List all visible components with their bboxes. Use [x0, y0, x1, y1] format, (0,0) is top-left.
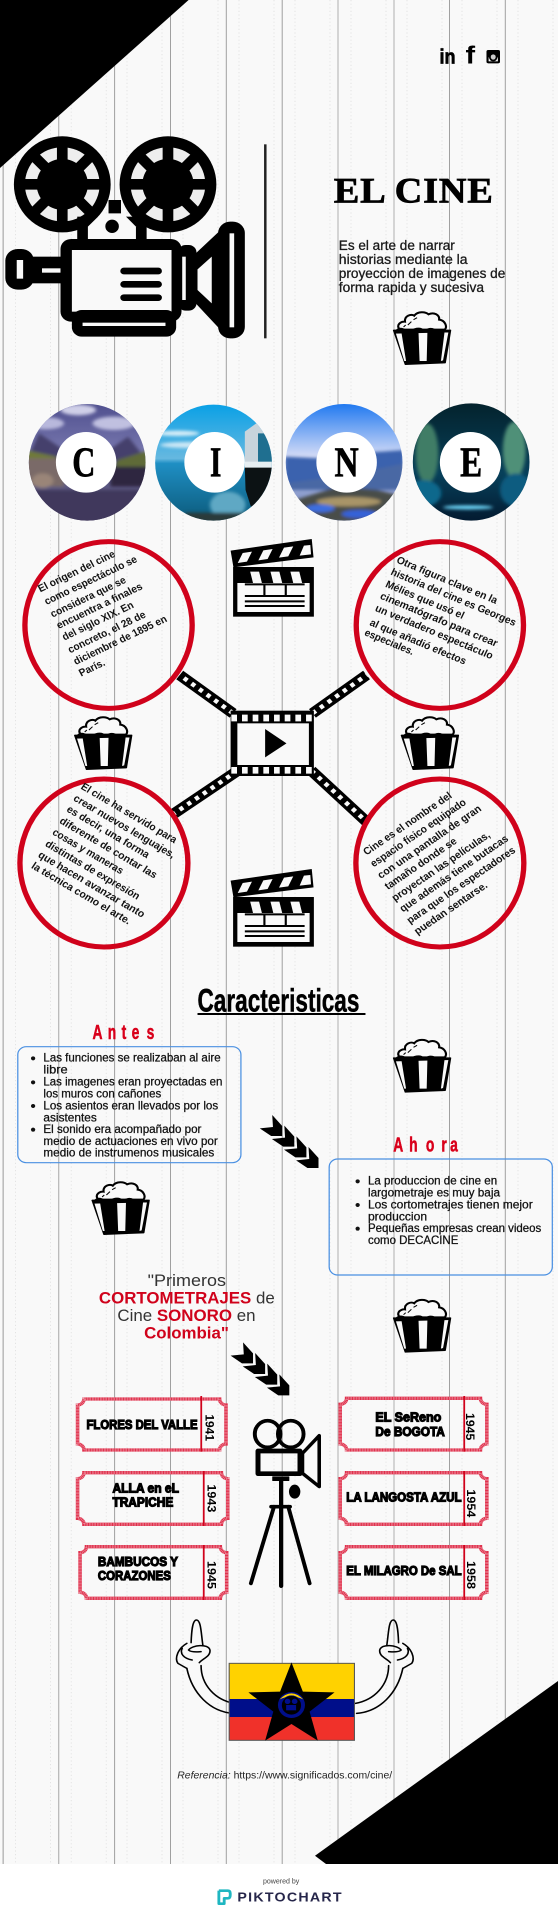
panel: antes — [18, 1047, 241, 1163]
icon: popcorn right — [401, 717, 458, 769]
text: circle bottom left: la técnica como el arte. — [29, 860, 133, 927]
description text: Es el arte de narrar — [339, 238, 455, 254]
arrow: chevrons — [231, 1342, 289, 1395]
text: circle top left: encuentra a finales — [55, 581, 145, 632]
ticket: El Sereno de Bogota 1945: De BOGOTA — [375, 1424, 445, 1439]
text: circle top right: historia del cine es Georges — [389, 566, 518, 629]
text: circle bottom left: El cine ha servido para — [78, 781, 179, 846]
ticket: Bambucos y Corazones 1945 — [80, 1545, 227, 1600]
social icons: in — [439, 45, 456, 68]
description text: forma rapida y sucesiva — [339, 280, 485, 296]
panel: ahora: como DECACINE — [368, 1233, 458, 1247]
circle top right — [356, 542, 523, 708]
photo circle: I — [153, 403, 275, 523]
heading: Antes: Antes — [93, 1020, 154, 1044]
photo circle: E: E — [460, 439, 482, 486]
ticket: Flores del Valle 1941 — [78, 1396, 226, 1452]
description text: historias mediante la — [339, 252, 469, 268]
panel: antes: libre — [43, 1063, 68, 1077]
description text: proyeccion de imagenes de — [339, 266, 505, 282]
ticket: La Langosta Azul 1954: 1954 — [464, 1489, 477, 1518]
ticket: Alla en el Trapiche 1943 — [78, 1471, 228, 1526]
film strips — [174, 675, 367, 822]
text: circle bottom left: cosas y maneras — [50, 827, 126, 877]
icon: clapperboard top — [231, 539, 314, 617]
text: circle top right: especiales. — [362, 627, 416, 658]
text: circle bottom left: crear nuevos lenguajes, — [71, 793, 177, 861]
panel: antes: El sonido era acompañado por — [43, 1122, 201, 1136]
icon: right arm — [356, 1620, 413, 1713]
text: circle top left — [36, 548, 169, 679]
ticket: El Sereno de Bogota 1945 — [340, 1396, 487, 1452]
ticket: La Langosta Azul 1954: LA LANGOSTA AZUL — [346, 1490, 462, 1505]
footer: powered by piktochart: PIKTOCHART — [237, 1890, 342, 1905]
title: EL CINE — [334, 171, 493, 211]
panel: antes: Los asientos eran llevados por los — [43, 1099, 218, 1112]
heading: Caracteristicas: Caracteristicas — [198, 983, 359, 1019]
ticket: Bambucos y Corazones 1945: 1945 — [204, 1561, 218, 1590]
text: circle bottom right: para que los espectadores — [405, 845, 518, 926]
panel: antes: medio de instrumenos musicales — [43, 1146, 214, 1160]
ticket: Flores del Valle 1941: 1941 — [203, 1414, 216, 1441]
ticket: Alla en el Trapiche 1943: ALLA en eL — [112, 1481, 179, 1496]
social icons: f — [465, 40, 475, 69]
text: circle bottom right: con una pantalla de gran — [375, 803, 484, 881]
footer: powered by piktochart: powered by — [263, 1877, 299, 1886]
heading: primeros cortometrajes: CORTOMETRAJES de — [99, 1288, 275, 1307]
text: circle bottom right: puedan sentarse. — [412, 880, 490, 937]
photo circle: N — [285, 403, 404, 522]
text: circle top right: Otra figura clave en la — [394, 554, 499, 607]
text: circle top right — [362, 554, 518, 667]
heading: primeros cortometrajes — [99, 1271, 275, 1342]
photo circle: C: C — [72, 439, 95, 486]
central film hub and story circles — [20, 675, 524, 947]
text: circle top right: Mélies que usó el — [383, 579, 466, 622]
icon: popcorn — [394, 1300, 451, 1352]
ticket: La Langosta Azul 1954 — [340, 1471, 487, 1526]
icon: left arm — [177, 1620, 234, 1713]
ticket: Bambucos y Corazones 1945: BAMBUCOS Y — [98, 1554, 178, 1569]
icon: popcorn — [394, 312, 451, 364]
ticket: El Sereno de Bogota 1945: EL SeReno — [375, 1410, 441, 1425]
cortometrajes section — [78, 1271, 487, 1600]
icon: popcorn upper right — [394, 1040, 451, 1092]
description text — [339, 238, 505, 296]
text: circle top right: un verdadero espectáculo — [373, 603, 495, 662]
panel: ahora: largometraje es muy baja — [368, 1186, 500, 1199]
CINE letter circles and top story circles — [25, 400, 532, 617]
text: circle bottom left — [29, 781, 179, 927]
circle top left — [25, 542, 192, 708]
text: circle top right: cinematógrafo para crear — [378, 590, 500, 650]
text: circle top left: diciembre de 1895 en — [72, 613, 169, 668]
ticket: El Milagro de Sal 1958: EL MILAGRO De SAL — [346, 1563, 462, 1578]
text: circle top left: del siglo XIX. En — [60, 599, 136, 643]
text: circle bottom left: que hacen avanzar tanto — [36, 849, 147, 921]
photo circle: C — [28, 404, 146, 521]
icon: popcorn lower left — [92, 1182, 149, 1234]
panel: ahora: produccion — [368, 1210, 427, 1223]
text: circle top right: al que añadió efectos — [368, 617, 468, 667]
caracteristicas section — [18, 983, 552, 1275]
reference text: Referencia: https://www.significados.com/cine/ — [177, 1771, 392, 1782]
icon: camera on tripod — [251, 1421, 319, 1586]
icon: central film frame with play — [231, 711, 314, 776]
flag section — [177, 1620, 413, 1905]
ticket: Flores del Valle 1941: FLORES DEL VALLE — [86, 1417, 198, 1432]
panel: ahora — [329, 1159, 552, 1275]
text: circle bottom left: distintas de expresión — [43, 838, 142, 902]
text: circle bottom left: diferente de contar las — [57, 815, 159, 881]
text: circle bottom left: es decir, una forma — [64, 804, 152, 861]
circle bottom left — [20, 779, 188, 947]
icon: clapperboard bottom — [231, 869, 314, 947]
text: circle bottom right: proyectan las películas, — [390, 829, 493, 904]
photo circle: N: N — [335, 439, 359, 486]
ticket: El Sereno de Bogota 1945: 1945 — [463, 1413, 477, 1441]
ticket: El Milagro de Sal 1958: 1958 — [464, 1561, 477, 1590]
heading: primeros cortometrajes: "Primeros — [148, 1271, 226, 1290]
ticket: El Milagro de Sal 1958 — [340, 1545, 487, 1600]
panel: ahora: La produccion de cine en — [368, 1174, 497, 1188]
photo circle: I: I — [210, 439, 221, 486]
arrow: chevrons — [260, 1115, 319, 1168]
text: circle bottom right: Cine es el nombre del — [361, 790, 454, 858]
text: circle bottom right — [361, 790, 518, 937]
top story circles — [25, 542, 523, 708]
text: circle top left: como espectáculo se — [42, 554, 139, 608]
text: circle top left: El origen del cine — [36, 548, 117, 595]
corner triangle: bottom right — [315, 1681, 558, 1864]
text: circle bottom right: espacio físico equipado — [368, 797, 469, 870]
text: circle top left: concreto, el 28 de — [66, 609, 148, 656]
panel: antes: los muros con cañones — [43, 1087, 161, 1100]
vertical divider — [264, 144, 267, 338]
text: circle bottom right: tamaño donde se — [382, 836, 459, 892]
panel: antes: asistentes — [43, 1111, 97, 1124]
text: circle top left: París. — [77, 657, 107, 679]
ticket: Alla en el Trapiche 1943: 1943 — [204, 1484, 218, 1513]
ticket: Alla en el Trapiche 1943: TRAPICHE — [112, 1495, 174, 1510]
circle bottom right — [356, 779, 524, 947]
icon: popcorn left — [75, 717, 132, 769]
icon: film projector — [5, 136, 245, 338]
panel: ahora: Pequeñas empresas crean videos — [368, 1221, 541, 1235]
panel: antes: Las funciones se realizaban al aire — [43, 1051, 221, 1065]
footer: powered by piktochart — [219, 1877, 342, 1905]
heading: Ahora: Ahora — [393, 1133, 458, 1156]
icon: colombian flag with star — [229, 1662, 354, 1741]
photo circle: E — [406, 402, 532, 522]
ticket: Bambucos y Corazones 1945: CORAZONES — [98, 1568, 171, 1583]
text: circle top left: considera que se — [48, 574, 128, 620]
text: circle bottom right: que además tiene butacas — [397, 833, 511, 915]
panel: antes: medio de actuaciones en vivo por — [43, 1134, 218, 1148]
heading: primeros cortometrajes: Cine SONORO en — [117, 1306, 256, 1325]
panel: antes: Las imagenes eran proyectadas en — [43, 1075, 222, 1089]
panel: ahora: Los cortometrajes tienen mejor — [368, 1198, 533, 1211]
social icons — [439, 40, 500, 69]
heading: primeros cortometrajes: Colombia" — [144, 1323, 229, 1342]
corner triangle: top left — [0, 0, 189, 168]
header section — [5, 40, 505, 364]
